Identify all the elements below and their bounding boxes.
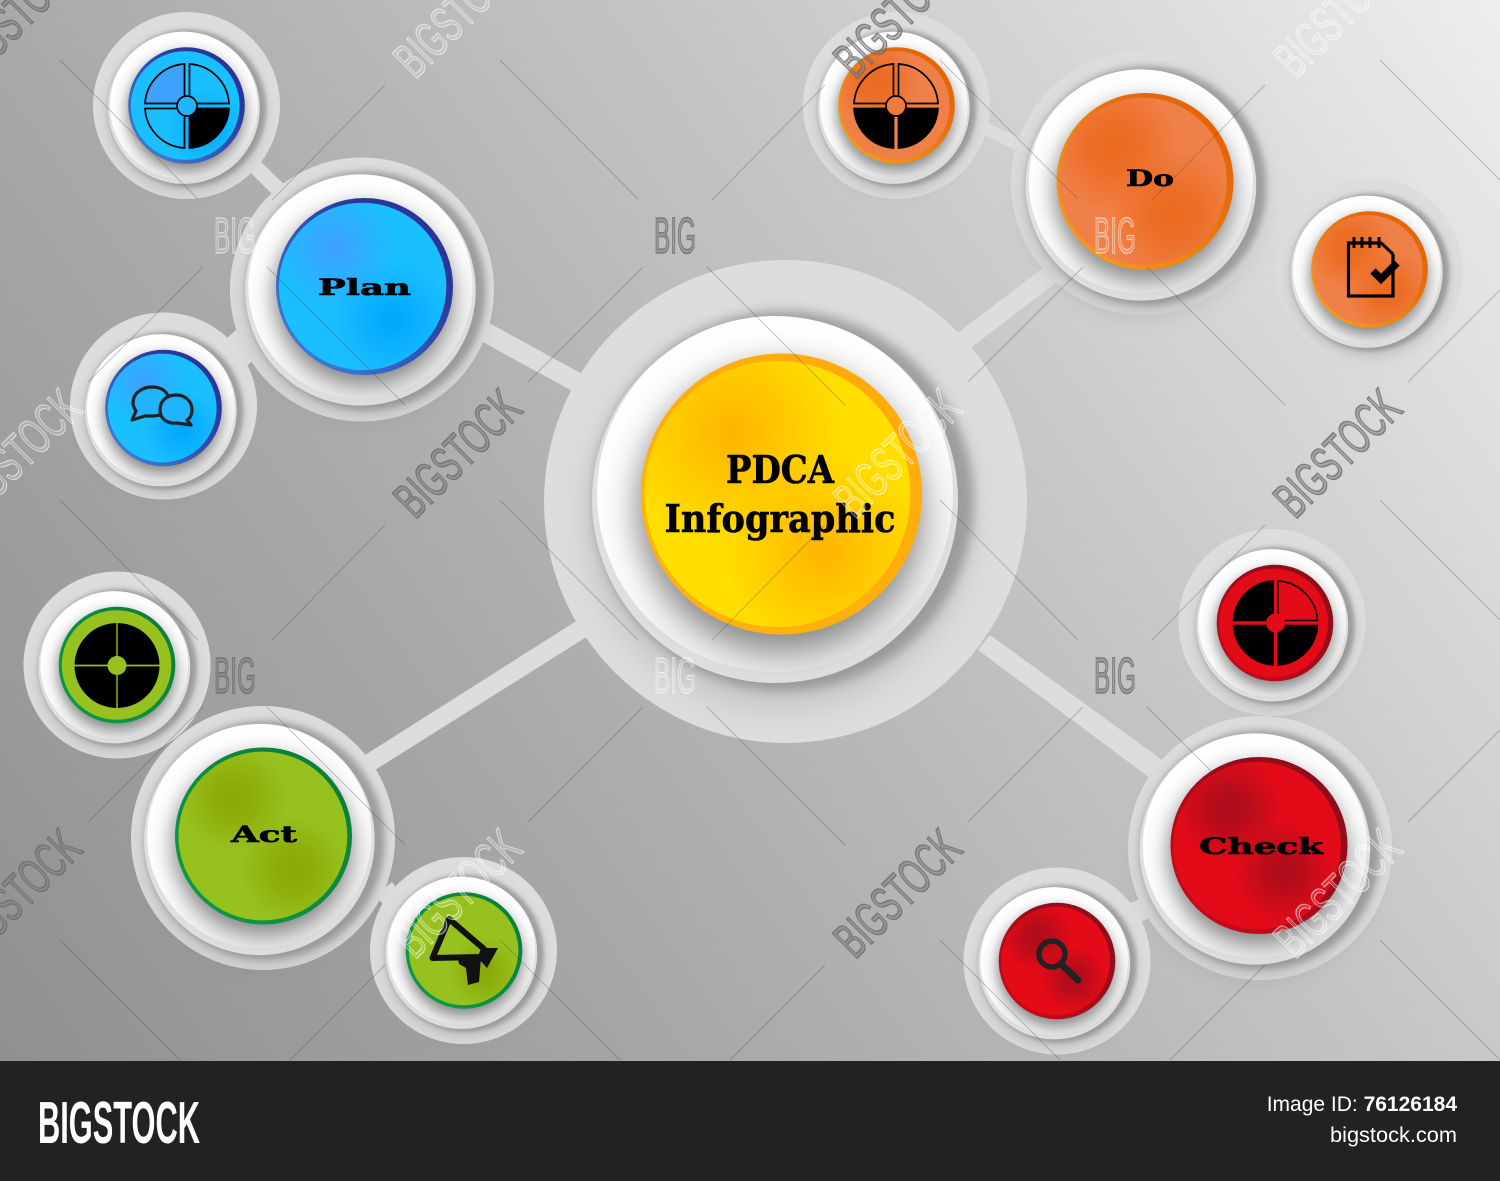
halo: megaphone bbox=[370, 857, 557, 1044]
footer logo: BIGSTOCK bbox=[38, 1090, 200, 1156]
icon: target with bottom half filled bbox=[854, 64, 938, 148]
watermark pattern: BIGSTOCK bbox=[1263, 379, 1412, 528]
connector: Act to megaphone bbox=[375, 882, 405, 915]
connector: centre to Do bbox=[955, 255, 1075, 350]
watermark pattern: BIG bbox=[654, 207, 696, 264]
watermark pattern: BIG bbox=[214, 647, 256, 704]
connector: Do to orange target bbox=[975, 122, 1030, 155]
watermark pattern: BIG bbox=[1094, 207, 1136, 264]
halo: orange target bbox=[803, 12, 990, 199]
icon: speech bubbles bbox=[132, 387, 192, 425]
icon: target with one open quadrant bbox=[1234, 581, 1318, 665]
watermark pattern: BIGSTOCK bbox=[383, 379, 532, 528]
panel: centre node bbox=[588, 311, 974, 708]
panel: chat node bbox=[83, 332, 243, 497]
icon: notepad with check mark bbox=[1348, 237, 1397, 296]
icon: fully filled target bbox=[74, 622, 160, 708]
watermark pattern: BIG bbox=[654, 647, 696, 704]
subtitle: Infographic bbox=[664, 496, 896, 541]
label: Check: Check bbox=[1199, 834, 1324, 860]
label: Do: Do bbox=[1126, 166, 1174, 192]
halo: Act bbox=[131, 706, 395, 970]
panel: red target node bbox=[1194, 547, 1355, 712]
connector: Plan to chat bbox=[225, 328, 258, 368]
panel: Act node bbox=[141, 721, 384, 971]
icon: target with bottom-right quadrant filled bbox=[145, 64, 229, 148]
panel: Plan node bbox=[242, 171, 485, 421]
connector: centre to Check bbox=[978, 635, 1165, 778]
title: PDCA bbox=[726, 447, 834, 492]
panel: magnifier node bbox=[976, 885, 1137, 1050]
halo: red target bbox=[1178, 529, 1366, 716]
halo: Do bbox=[1011, 51, 1275, 315]
label: Act: Act bbox=[229, 822, 298, 848]
halo: chat bbox=[70, 312, 257, 500]
connector: Plan to blue target bbox=[248, 160, 290, 200]
image id: Image ID: 76126184 bbox=[1267, 1093, 1457, 1116]
panel: orange target node bbox=[816, 30, 976, 194]
label: Plan: Plan bbox=[318, 275, 411, 301]
icon: magnifying glass bbox=[1039, 941, 1078, 980]
halo: Check bbox=[1128, 716, 1392, 980]
halo: Plan bbox=[230, 158, 494, 422]
site url: bigstock.com bbox=[1330, 1124, 1457, 1147]
watermark pattern: BIG bbox=[214, 207, 256, 264]
panel: Do node bbox=[1023, 66, 1266, 316]
halo: magnifier bbox=[964, 868, 1150, 1054]
halo: green target bbox=[24, 572, 210, 758]
connector: Check to magnifier bbox=[1125, 895, 1155, 925]
watermark pattern: BIGSTOCK bbox=[1263, 819, 1412, 968]
halo: centre bbox=[544, 260, 1027, 743]
panel: Check node bbox=[1137, 730, 1380, 980]
panel: blue target node bbox=[106, 30, 266, 194]
panel: green target node bbox=[36, 589, 197, 754]
halo: notepad bbox=[1276, 178, 1463, 364]
watermark pattern: BIGSTOCK bbox=[823, 819, 972, 968]
watermark pattern: BIGSTOCK bbox=[383, 819, 532, 968]
panel: notepad node bbox=[1289, 194, 1449, 358]
halo: blue target bbox=[93, 12, 280, 199]
panel: megaphone node bbox=[383, 875, 544, 1039]
connector: centre to Plan bbox=[470, 318, 595, 398]
watermark pattern: BIGSTOCK bbox=[823, 379, 972, 528]
connector: centre to Act bbox=[365, 620, 588, 770]
footer bar bbox=[0, 1061, 1500, 1181]
watermark pattern: BIG bbox=[1094, 647, 1136, 704]
icon: megaphone bbox=[432, 919, 498, 985]
